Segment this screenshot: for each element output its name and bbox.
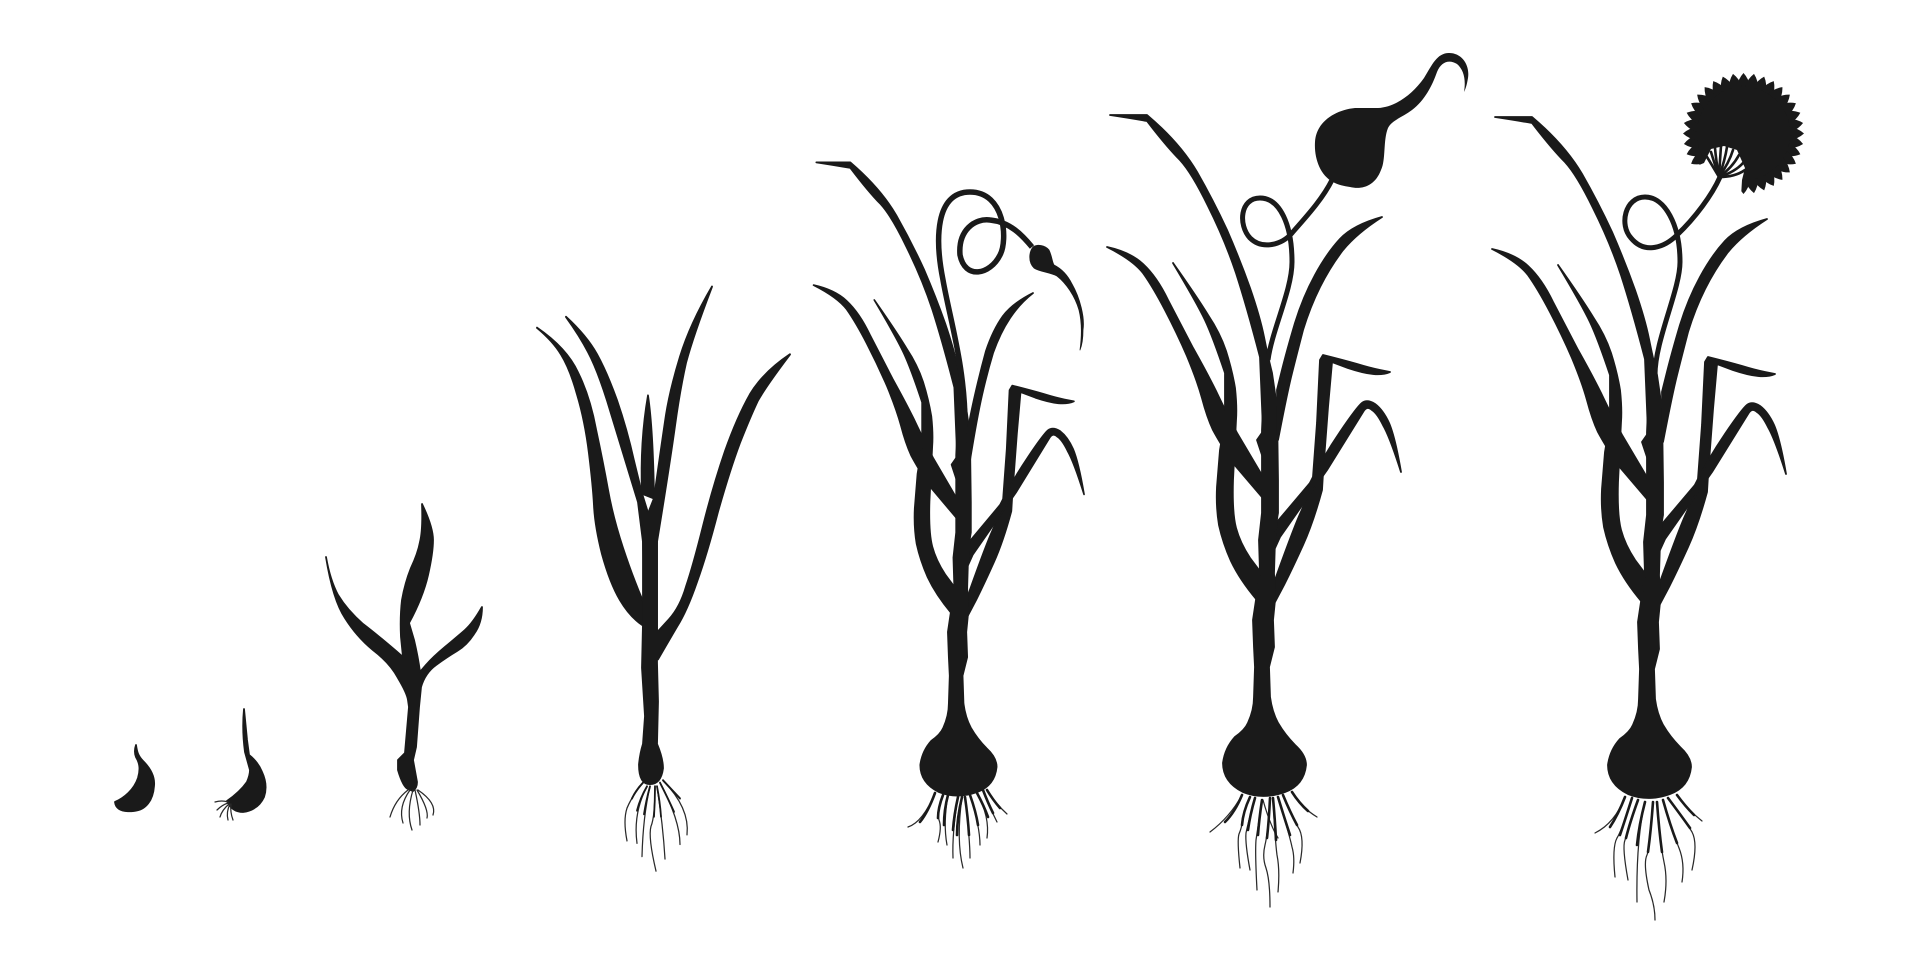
- plant stage 7: mature plant with flower head: [1492, 73, 1804, 920]
- leaves, stem and bulb: [814, 162, 1084, 796]
- roots: [908, 790, 1007, 868]
- plant stage 5: plant with curled scape and small bud: [814, 162, 1084, 868]
- looped flower stalk: [1625, 177, 1720, 375]
- leaves, stem and bulb: [1107, 115, 1401, 796]
- looped flower stalk: [1243, 180, 1332, 360]
- swollen flower bud: [1315, 53, 1468, 188]
- leaves, stem and bulb: [326, 504, 482, 791]
- short right upper leaf: [967, 293, 1033, 460]
- roots: [390, 790, 434, 830]
- plant stage 1: garlic clove: [115, 745, 154, 811]
- roots: [1210, 792, 1317, 907]
- clove and shoot: [227, 709, 266, 812]
- roots: [625, 780, 687, 871]
- leaves, stem and bulb: [1492, 117, 1786, 798]
- plant stage 6: plant with large swollen flower bud: [1107, 53, 1468, 907]
- plant stage 3: seedling with three leaves: [326, 504, 482, 830]
- right upper leaf: [1277, 217, 1382, 440]
- right upper leaf: [1662, 219, 1767, 442]
- roots: [215, 801, 233, 820]
- leaves and stem: [537, 287, 790, 784]
- plant stage 2: sprouting clove with first roots: [215, 709, 266, 820]
- plant stage 4: young plant with five leaves: [537, 287, 790, 871]
- curled flower stalk: [939, 192, 1032, 430]
- fan of pedicels under flower head: [1707, 146, 1745, 177]
- spiky round flower head: [1680, 73, 1804, 197]
- flower bud with beak: [1030, 245, 1083, 350]
- roots: [1595, 795, 1702, 920]
